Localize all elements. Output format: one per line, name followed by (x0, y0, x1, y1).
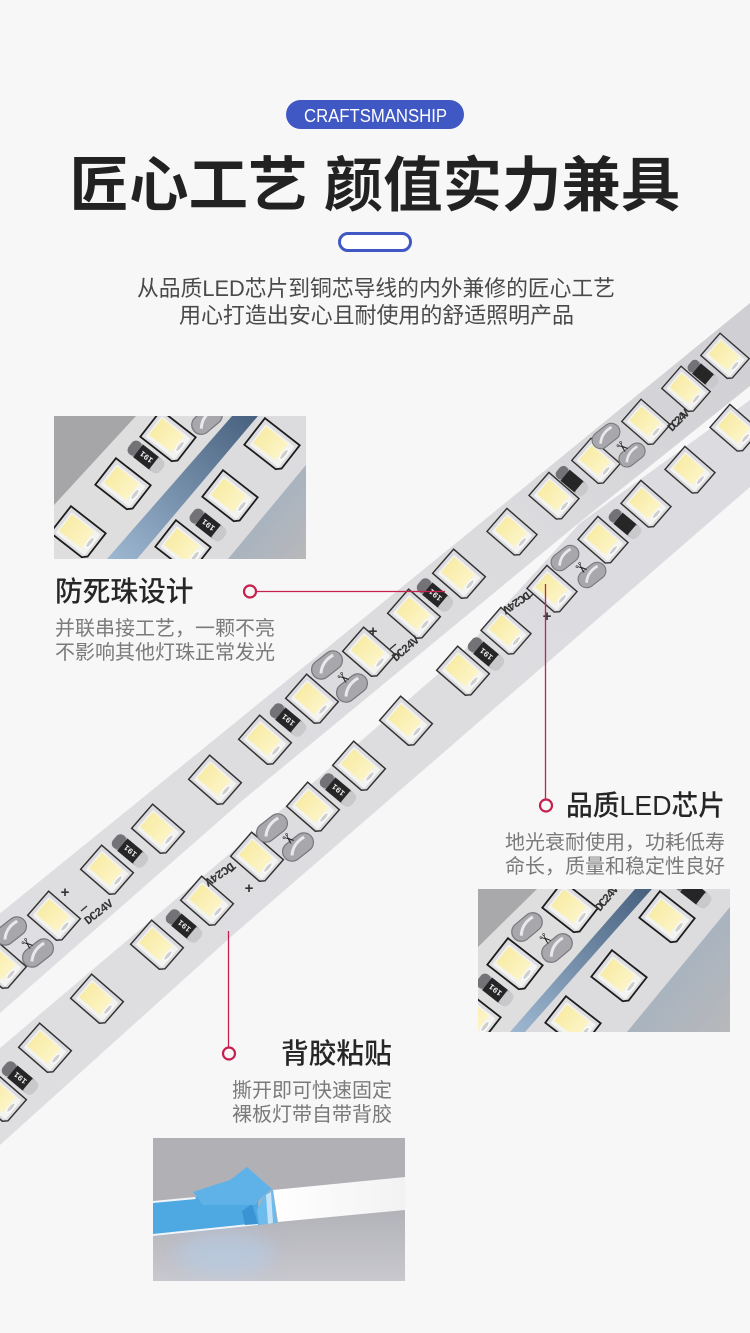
description: anti-dead-bead design (55, 617, 275, 664)
description: adhesive backing: 撕开即可快速固定 (232, 1079, 392, 1102)
tag: CRAFTSMANSHIP: CRAFTSMANSHIP (304, 106, 447, 126)
LED strip: upper: + (369, 623, 378, 640)
tag: CRAFTSMANSHIP (286, 100, 464, 129)
inset photo: LED chip close-up: 191 (487, 981, 505, 997)
heading: anti-dead-bead design: 防死珠设计 (55, 576, 193, 607)
decorative pill (340, 234, 410, 250)
description: adhesive backing: 裸板灯带自带背胶 (232, 1103, 392, 1126)
leader line: adhesive backing (223, 931, 235, 1060)
LED strip: lower: 191 (478, 645, 495, 661)
LED strip: lower: ✂ (571, 557, 592, 579)
LED strip: upper: DC24V (82, 896, 117, 928)
LED strip: upper: 191 (280, 711, 297, 727)
description: anti-dead-bead design: 不影响其他灯珠正常发光 (55, 641, 275, 664)
description: quality LED chip: 命长，质量和稳定性良好 (505, 855, 725, 878)
inset photo: peeled adhesive tape (153, 1138, 405, 1281)
leader line: anti-dead-bead design (244, 586, 445, 598)
LED strip: lower: ✂ (278, 828, 299, 850)
LED strip: upper: DC24V (665, 406, 694, 435)
inset photo: LED chip close-up (478, 889, 730, 1032)
title: 匠心工艺 颜值实力兼具 (70, 152, 680, 219)
inset photo: strip close-up (54, 416, 306, 559)
subtitle: 用心打造出安心且耐使用的舒适照明产品 (179, 303, 574, 328)
inset photo: strip close-up: 191 (138, 448, 156, 464)
LED strip: upper: + (61, 884, 70, 901)
LED strip: lower: 191 (12, 1069, 29, 1085)
description: adhesive backing (232, 1079, 392, 1126)
LED strip: lower: 191 (330, 781, 347, 797)
description: quality LED chip: 地光衰耐使用，功耗低寿 (505, 831, 725, 854)
inset photo: LED chip close-up: DC24V (592, 882, 623, 915)
LED strip: upper (0, 303, 750, 1013)
subtitle (137, 276, 615, 328)
description: quality LED chip (505, 831, 725, 878)
leader line: quality LED chip (540, 584, 552, 812)
LED strip: upper: ✂ (333, 667, 354, 689)
subtitle: 从品质LED芯片到铜芯导线的内外兼修的匠心工艺 (137, 276, 615, 301)
LED strip: lower (0, 400, 750, 1145)
heading: adhesive backing: 背胶粘贴 (281, 1038, 392, 1069)
LED strip: lower: DC24V (201, 859, 237, 889)
description: anti-dead-bead design: 并联串接工艺，一颗不亮 (55, 617, 275, 640)
inset photo: strip close-up: 191 (200, 516, 218, 532)
LED strip: lower: + (543, 608, 552, 625)
inset photo: LED chip close-up: ✂ (535, 928, 556, 950)
LED strip: lower: 191 (176, 917, 193, 933)
LED strip: upper: 191 (427, 586, 444, 602)
LED strip: upper: ✂ (612, 436, 633, 458)
LED strip: lower: + (245, 880, 254, 897)
heading: quality LED chip: 品质LED芯片 (566, 790, 725, 821)
LED strip: lower: DC24V (498, 588, 533, 617)
LED strip: upper: ✂ (17, 933, 38, 955)
LED strip: upper: DC24V (389, 633, 423, 665)
LED strip: upper: 191 (122, 842, 139, 858)
